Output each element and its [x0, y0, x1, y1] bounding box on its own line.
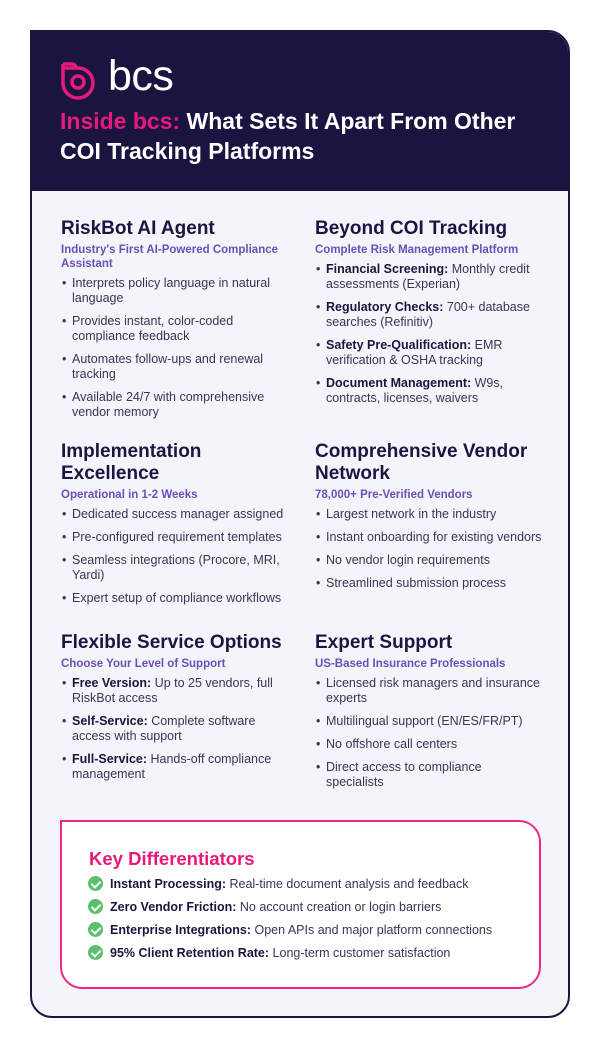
panel: Expert Support: US-Based Insurance Professionals — [315, 658, 505, 670]
panel: Beyond COI Tracking: Financial Screening: Monthly credit — [326, 262, 530, 276]
panel: Implementation Excellence — [61, 441, 283, 605]
panel: RiskBot AI Agent: Assistant — [61, 258, 113, 270]
panel: RiskBot AI Agent: tracking — [72, 367, 116, 381]
item: zero vendor friction: Zero Vendor Friction: No account creation or login barriers — [110, 900, 441, 914]
panel: Implementation Excellence: Excellence — [61, 463, 159, 484]
panel: Expert Support: No offshore call centers — [326, 737, 457, 751]
panel: Flexible Service Options — [61, 632, 282, 781]
panel: Flexible Service Options: Choose Your Level of Support — [61, 658, 225, 670]
panel: RiskBot AI Agent: Industry's First AI-Powered Compliance — [61, 244, 278, 256]
panel: Key Differentiators — [60, 820, 541, 989]
heading: Key Differentiators — [89, 848, 255, 869]
panel: RiskBot AI Agent: compliance feedback — [72, 329, 189, 343]
panel: Flexible Service Options: Self-Service: Complete software — [72, 714, 255, 728]
panel: Beyond COI Tracking: Regulatory Checks: 700+ database — [326, 300, 530, 314]
panel: Beyond COI Tracking: Safety Pre-Qualification: EMR — [326, 338, 502, 352]
panel: Comprehensive Vendor Network — [315, 441, 541, 590]
panel: Expert Support — [315, 632, 540, 789]
panel: Implementation Excellence: Expert setup of compliance workflows — [72, 591, 281, 605]
panel: Expert Support: Licensed risk managers and insurance — [326, 676, 540, 690]
panel: Flexible Service Options: management — [72, 767, 145, 781]
panel: Flexible Service Options: Free Version: Up to 25 vendors, full — [72, 676, 273, 690]
panel: Comprehensive Vendor Network: Streamlined submission process — [326, 576, 506, 590]
panel: Expert Support: specialists — [326, 775, 384, 789]
panel: Beyond COI Tracking — [315, 218, 530, 405]
item: instant processing: Instant Processing: Real-time document analysis and feedback — [110, 877, 468, 891]
title: COI Tracking Platforms — [60, 138, 314, 164]
panel: RiskBot AI Agent: Provides instant, color-coded — [72, 314, 233, 328]
panel: Flexible Service Options: Full-Service: Hands-off compliance — [72, 752, 271, 766]
panel: Implementation Excellence: Operational in 1-2 Weeks — [61, 489, 198, 501]
panel: Expert Support: experts — [326, 691, 367, 705]
panel: RiskBot AI Agent: language — [72, 291, 123, 305]
panel: Comprehensive Vendor Network: Network — [315, 463, 390, 484]
panel: Implementation Excellence: Dedicated success manager assigned — [72, 507, 283, 521]
title — [60, 108, 515, 164]
panel: Beyond COI Tracking: assessments (Experian) — [326, 277, 460, 291]
logo text: bcs — [108, 52, 173, 100]
panel: RiskBot AI Agent: Available 24/7 with comprehensive — [72, 390, 264, 404]
panel: Comprehensive Vendor Network: Largest network in the industry — [326, 507, 496, 521]
panel: Implementation Excellence: Seamless integrations (Procore, MRI, — [72, 553, 280, 567]
item: retention rate: 95% Client Retention Rate: Long-term customer satisfaction — [110, 946, 450, 960]
panel: Comprehensive Vendor Network: 78,000+ Pre-Verified Vendors — [315, 489, 473, 501]
panel: Flexible Service Options: RiskBot access — [72, 691, 157, 705]
panel: Beyond COI Tracking: Beyond COI Tracking — [315, 218, 507, 239]
panel: RiskBot AI Agent: Interprets policy language in natural — [72, 276, 270, 290]
panel: RiskBot AI Agent — [61, 218, 278, 419]
panel: RiskBot AI Agent: Automates follow-ups and renewal — [72, 352, 263, 366]
panel: Flexible Service Options: Flexible Service Options — [61, 632, 282, 653]
panel: Beyond COI Tracking: Document Management: W9s, — [326, 376, 503, 390]
icon: bcs logo mark — [61, 62, 95, 100]
panel: Beyond COI Tracking: verification & OSHA tracking — [326, 353, 483, 367]
panel: RiskBot AI Agent: vendor memory — [72, 405, 159, 419]
panel: Expert Support: Direct access to compliance — [326, 760, 482, 774]
panel: Beyond COI Tracking: Complete Risk Management Platform — [315, 244, 518, 256]
panel: Beyond COI Tracking: contracts, licenses, waivers — [326, 391, 478, 405]
panel: Implementation Excellence: Implementation — [61, 441, 201, 462]
panel: Flexible Service Options: access with support — [72, 729, 182, 743]
panel: RiskBot AI Agent: RiskBot AI Agent — [61, 218, 215, 239]
panel: Comprehensive Vendor Network: Comprehensive Vendor — [315, 441, 527, 462]
panel: Implementation Excellence: Pre-configured requirement templates — [72, 530, 282, 544]
logo — [61, 52, 173, 100]
panel: Comprehensive Vendor Network: Instant onboarding for existing vendors — [326, 530, 541, 544]
header — [32, 32, 568, 191]
panel: Implementation Excellence: Yardi) — [72, 568, 104, 582]
panel: Beyond COI Tracking: searches (Refinitiv) — [326, 315, 433, 329]
item: enterprise integrations: Enterprise Integrations: Open APIs and major platform connections — [110, 923, 492, 937]
panel: Expert Support: Expert Support — [315, 632, 452, 653]
title: Inside bcs: What Sets It Apart From Other — [60, 108, 515, 134]
panel: Expert Support: Multilingual support (EN/ES/FR/PT) — [326, 714, 523, 728]
panel: Comprehensive Vendor Network: No vendor login requirements — [326, 553, 490, 567]
